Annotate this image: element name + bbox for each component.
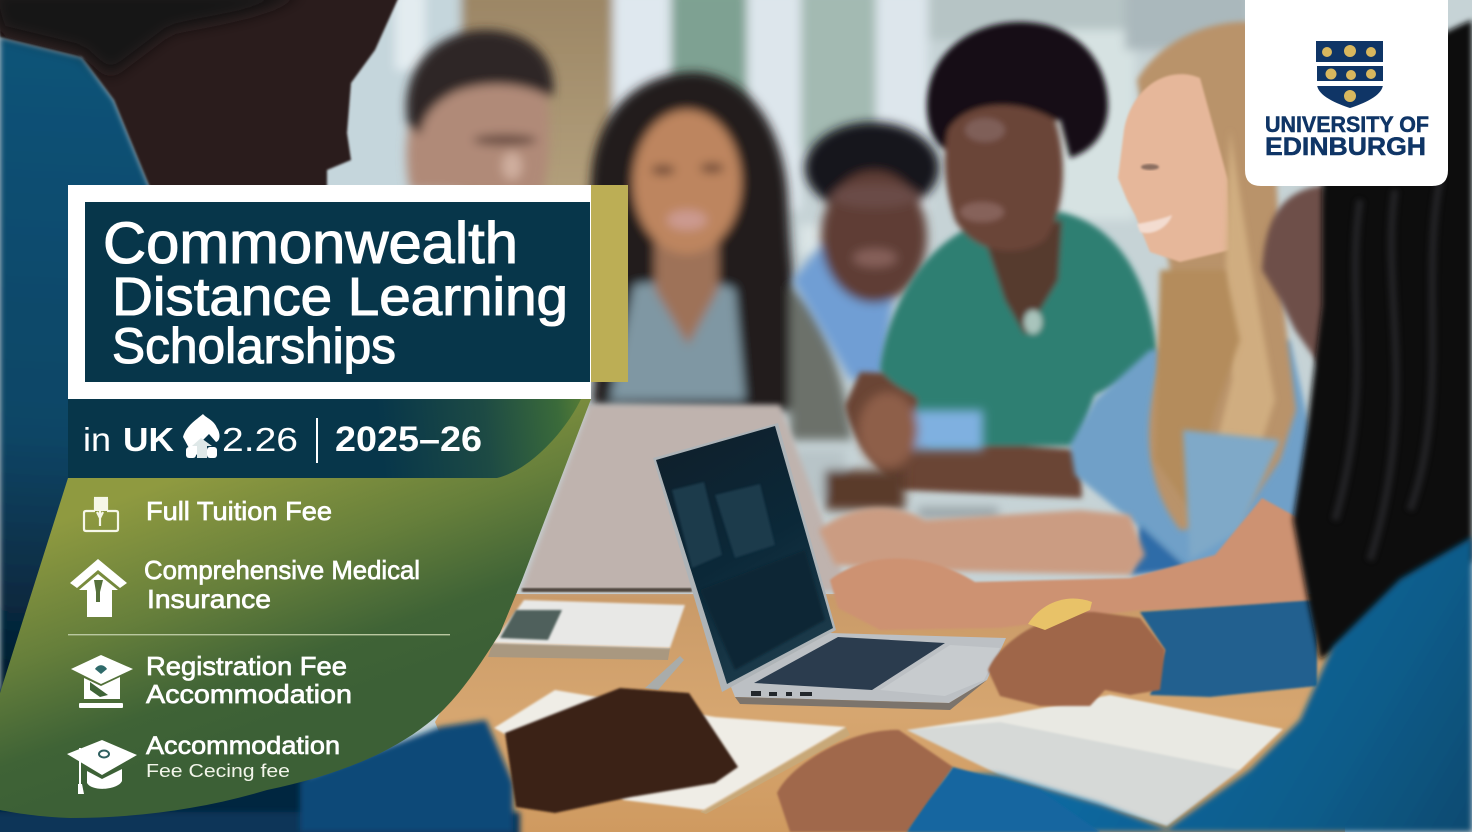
photo: hands and bare arms [819,498,1310,630]
band separator line [316,418,318,463]
white frame [68,185,591,399]
green benefits panel [0,399,591,818]
photo: back laptop [520,405,850,592]
photo: blonde woman [1070,22,1315,575]
photo: right foreground person [777,20,1472,832]
medical text [144,555,420,614]
title banner [68,185,628,399]
photo: left boy in background [406,30,553,195]
medical text: Insurance [147,584,271,614]
registration text: Accommodation [146,679,352,709]
ceiling fee text: Fee Cecing fee [146,761,290,781]
photo: notebook with phone [488,600,685,660]
photo: man in green polo [845,22,1158,498]
item: Accommodation Fee Ceiling [67,732,340,794]
icon: graduation cap [67,740,137,794]
photo: blue sleeve and blurred items behind table [795,392,998,519]
medical text: Comprehensive Medical [144,555,420,585]
panel divider [68,634,450,635]
item: Registration Fee Accommodation [71,651,352,709]
photo: open book on right [907,695,1283,826]
logo: wordmark: EDINBURGH [1265,133,1426,161]
photo: table surface [435,594,1345,832]
icon: horse crest [183,414,220,458]
olive accent block [590,185,628,382]
university logo card [1245,0,1448,186]
band text: location and year: UK [123,421,174,458]
photo: front notebook [494,690,850,814]
band text: location and year [83,420,482,459]
photo: right person's hand and denim sleeve [988,599,1317,706]
title text: Distance Learning [112,267,568,327]
accommodation text: Accommodation [146,732,340,760]
band text: location and year: in [83,421,111,458]
photo: left foreground person [0,0,738,832]
item: Full Tuition Fee [84,496,332,531]
logo: wordmark: UNIVERSITY OF [1265,112,1429,137]
item: Comprehensive Medical Insurance [70,555,420,617]
title text [103,211,568,374]
photo: centre girl [590,72,852,440]
photo: pen [645,656,684,690]
logo: crest shield [1316,41,1383,108]
dark date band [68,399,581,478]
icon: medical house [70,559,127,617]
title text: Commonwealth [103,211,518,276]
logo: wordmark [1265,112,1429,161]
registration text [146,651,352,709]
band text: location and year: 2.26 [222,421,298,458]
band text: location and year: 2025–26 [335,420,482,459]
item: Full Tuition Fee: Full Tuition Fee [146,496,332,526]
title text: Scholarships [112,318,396,374]
photo: back boy [792,122,939,380]
icon: cap over building [71,655,133,708]
photo: front laptop [653,423,1006,710]
icon: tuition desk figure [84,498,118,531]
dark title plate [85,202,590,382]
registration text: Registration Fee [146,651,347,681]
